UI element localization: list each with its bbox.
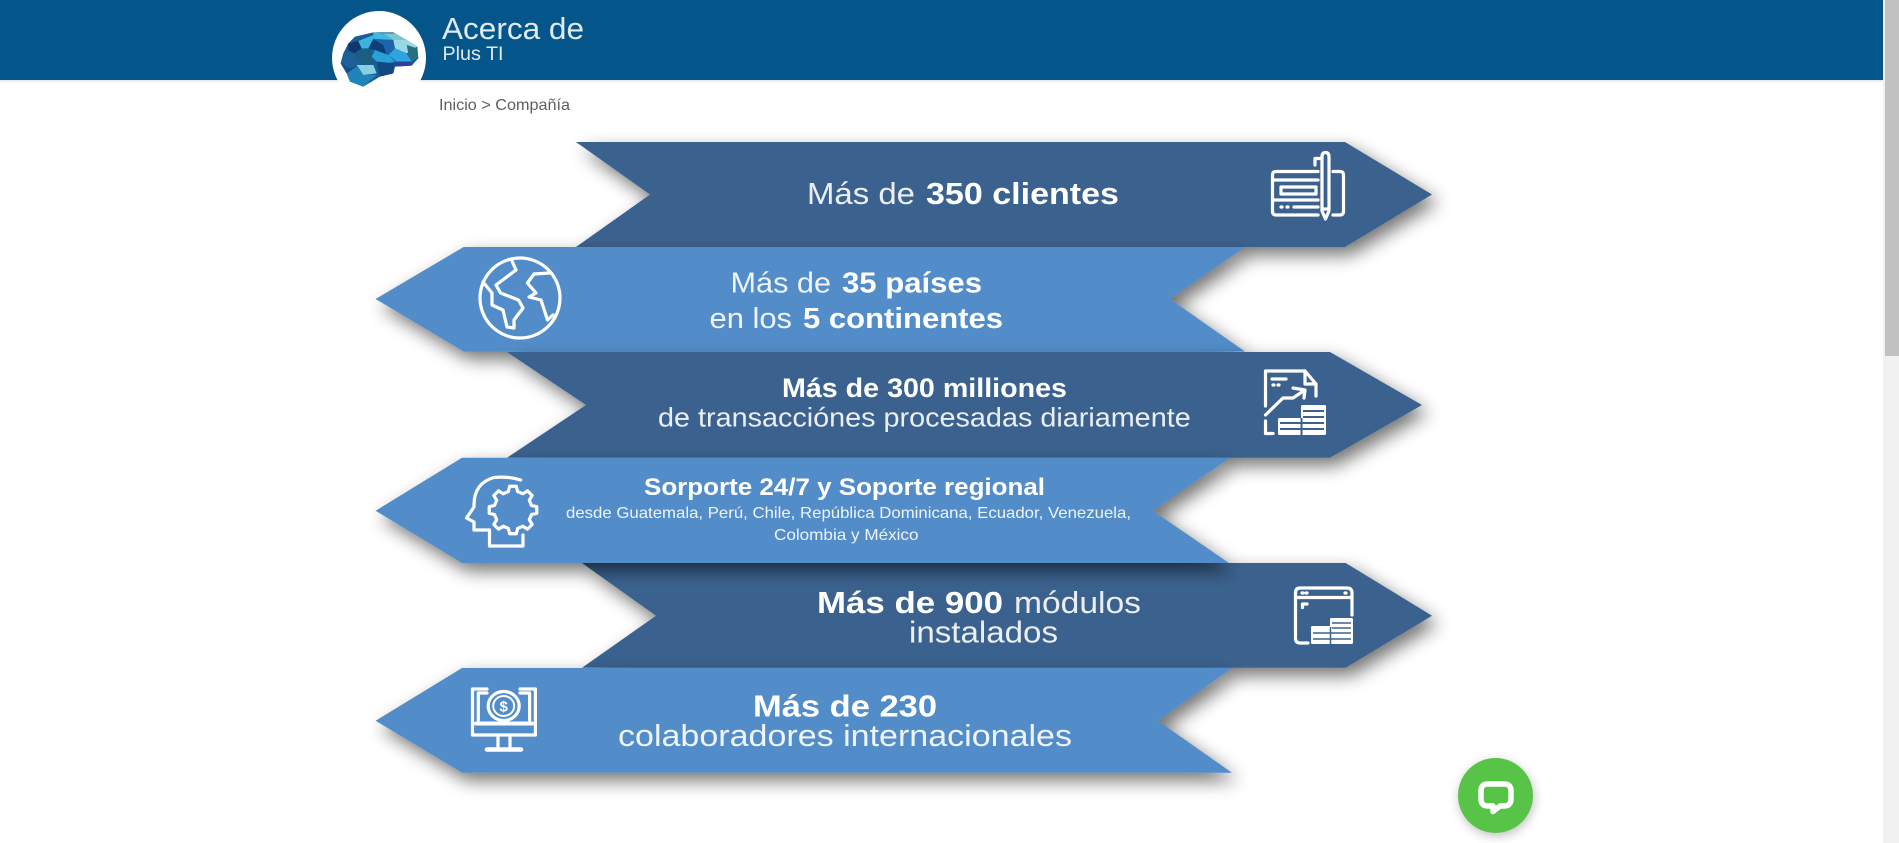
band 5: módulos: instalados [909,615,1058,650]
icon: head with gear [466,477,537,546]
breadcrumb: Inicio > Compañía [439,97,570,114]
header bar [0,0,1883,82]
band 5: módulos: Más de 900 [817,585,1003,620]
icon: document and pen [1272,152,1344,219]
band 1: clientes [576,142,1432,247]
band 6: colaboradores: Más de 230 [753,689,937,724]
band 4: soporte [376,458,1230,563]
icon: report and chart [1266,371,1326,435]
icon: monitor with dollar coin: $ [500,698,509,716]
chat button [1458,758,1533,833]
subtitle: Plus TI: Plus TI [442,43,504,65]
band 4: soporte: desde Guatemala, Perú, Chile, República Dominicana, Ecuador, Venezuela, [566,505,1131,522]
icon: speech bubble [1481,784,1511,812]
band 2: países [376,247,1245,352]
title: Acerca de: Acerca de [442,11,584,46]
band 5: módulos [582,563,1432,668]
band 5: módulos: módulos [1014,585,1141,620]
band 2: países: Más de [730,268,831,300]
band 3: transacciones: de transacciónes procesadas diariamente [658,403,1191,433]
band 6: colaboradores: colaboradores internacionales [618,718,1072,753]
band 2: países: 5 continentes [803,303,1003,335]
band 2: países: en los [710,303,792,335]
band 4: soporte: Sorporte 24/7 y Soporte regional [644,474,1045,501]
logo: brain in white circle [332,11,426,112]
band 4: soporte: Colombia y México [774,527,919,544]
band 3: transacciones: Más de 300 milliones [782,373,1067,403]
icon: window and table [1296,588,1353,644]
band 2: países: 35 países [842,268,982,300]
band 1: clientes: Más de [807,176,915,211]
band 3: transacciones [507,352,1422,458]
icon: globe [480,258,560,338]
icon: monitor with dollar coin [472,689,535,750]
band 6: colaboradores [376,668,1232,773]
band 1: clientes: 350 clientes [926,176,1119,211]
scrollbar [1883,0,1899,843]
